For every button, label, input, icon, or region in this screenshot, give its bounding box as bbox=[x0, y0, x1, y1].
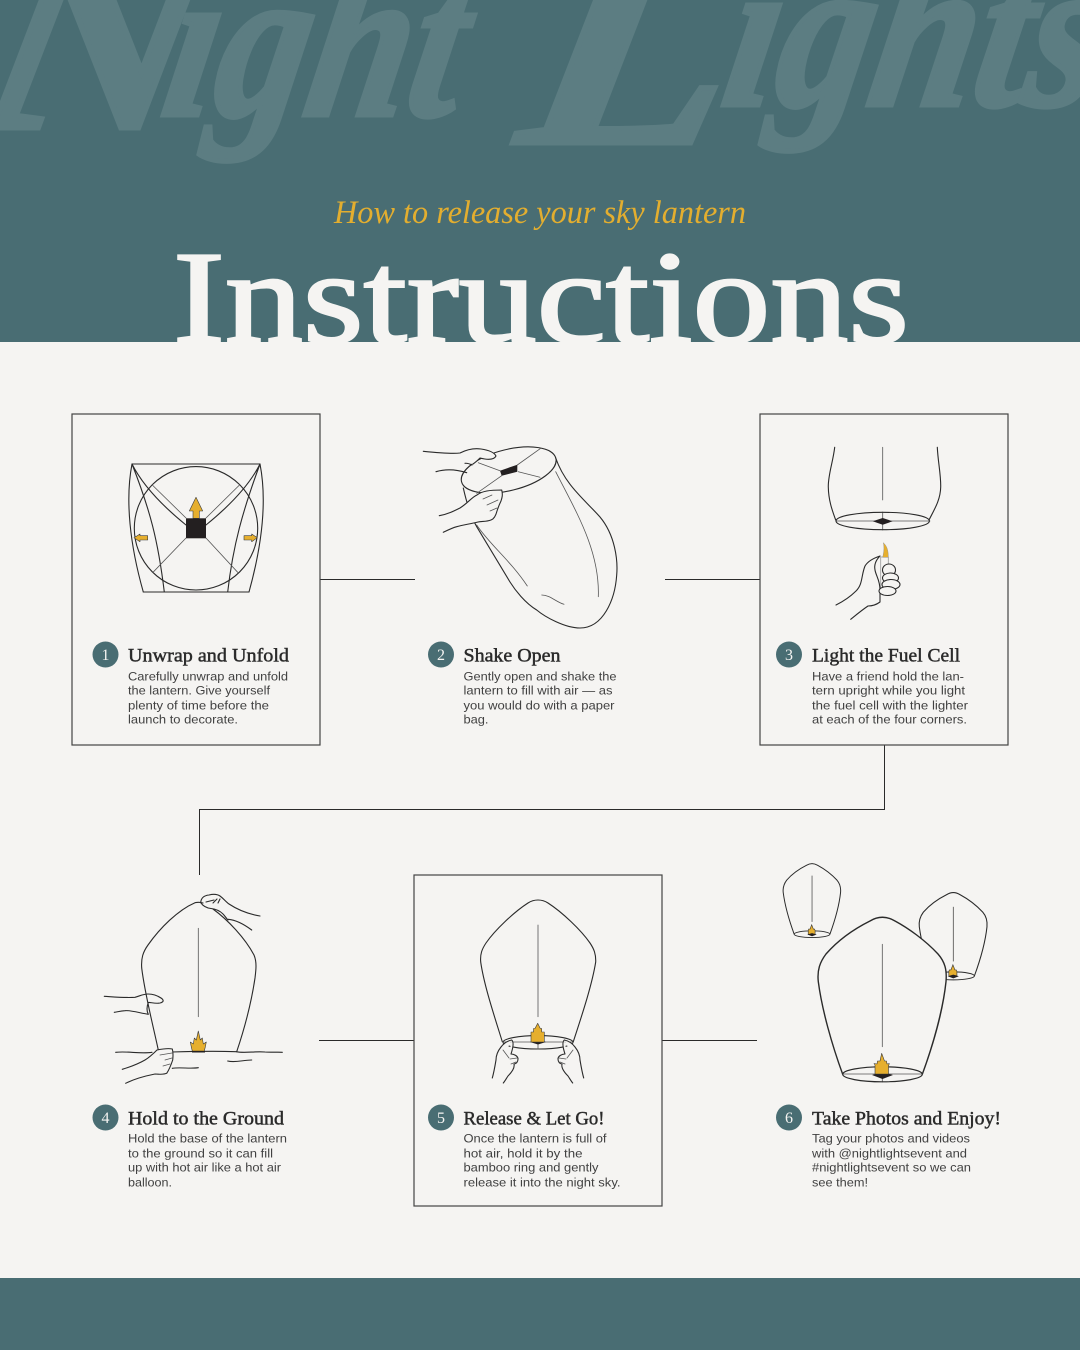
description: plenty of time before the bbox=[128, 698, 269, 712]
connector: step 5 to 6 bbox=[662, 1040, 757, 1042]
description bbox=[464, 670, 617, 726]
description: you would do with a paper bbox=[464, 698, 614, 712]
heading: Take Photos and Enjoy! bbox=[812, 1108, 1001, 1130]
title: Instructions: Instructions bbox=[173, 224, 909, 371]
description: #nightlightsevent so we can bbox=[812, 1160, 971, 1174]
connector: step 1 to 2 bbox=[320, 578, 415, 580]
panel frame bbox=[414, 875, 662, 1206]
description bbox=[811, 1132, 971, 1189]
small lantern right bbox=[919, 893, 987, 980]
panel: step 5 release and let go bbox=[414, 875, 662, 1206]
illustration: hands releasing lantern bbox=[481, 900, 596, 1083]
panel: step 3 light the fuel cell bbox=[760, 414, 1008, 745]
description: Have a friend hold the lan- bbox=[812, 670, 964, 684]
description: with @nightlightsevent and bbox=[811, 1146, 967, 1160]
description bbox=[128, 670, 288, 726]
description bbox=[128, 1132, 287, 1189]
heading: Unwrap and Unfold bbox=[128, 646, 290, 666]
badge 3 bbox=[776, 642, 802, 668]
description: tern upright while you light bbox=[812, 684, 966, 698]
description: launch to decorate. bbox=[128, 712, 238, 726]
badge 2 bbox=[428, 642, 454, 668]
description: the lantern. Give yourself bbox=[128, 684, 271, 698]
connector: step 3 to 4 bbox=[200, 745, 884, 875]
heading: Hold to the Ground bbox=[128, 1108, 285, 1130]
footer band bbox=[0, 1278, 1080, 1350]
description: lantern to fill with air — as bbox=[464, 684, 612, 698]
badge 4: 4 bbox=[102, 1110, 110, 1127]
description: Tag your photos and videos bbox=[812, 1132, 970, 1146]
illustration: unfolded lantern bbox=[129, 464, 263, 592]
description: up with hot air like a hot air bbox=[128, 1160, 281, 1174]
description: Gently open and shake the bbox=[464, 670, 617, 684]
small lantern left bbox=[783, 864, 841, 938]
heading: Release & Let Go! bbox=[464, 1108, 604, 1130]
panel: step 1 unwrap and unfold bbox=[72, 414, 320, 745]
description: release it into the night sky. bbox=[464, 1175, 620, 1189]
illustration: hands shaking lantern bbox=[423, 438, 617, 628]
description: bamboo ring and gently bbox=[464, 1160, 599, 1174]
description: at each of the four corners. bbox=[812, 712, 967, 726]
subtitle: How to release your sky lantern bbox=[333, 195, 746, 231]
panel: step 6 take photos and enjoy bbox=[776, 864, 1001, 1189]
description: Once the lantern is full of bbox=[464, 1132, 607, 1146]
watermark: Night Lights bbox=[0, 0, 1080, 205]
description: hot air, hold it by the bbox=[464, 1146, 583, 1160]
panel frame bbox=[760, 414, 1008, 745]
heading: Light the Fuel Cell bbox=[812, 646, 960, 666]
description bbox=[464, 1132, 620, 1189]
connector: step 4 to 5 bbox=[319, 1040, 414, 1042]
panel: step 2 shake open bbox=[423, 438, 617, 726]
illustration: lanterns in the sky bbox=[783, 864, 987, 1082]
description: bag. bbox=[464, 712, 488, 726]
large lantern bbox=[818, 917, 946, 1082]
badge 5: 5 bbox=[437, 1110, 445, 1127]
badge 4 bbox=[92, 1104, 118, 1130]
connector: step 2 to 3 bbox=[665, 578, 760, 580]
badge 5 bbox=[428, 1104, 454, 1130]
badge 1: 1 bbox=[102, 647, 110, 664]
badge 2: 2 bbox=[437, 647, 445, 664]
badge 6 bbox=[776, 1104, 802, 1130]
panel: step 4 hold to the ground bbox=[92, 894, 287, 1189]
illustration: holding lantern to the ground bbox=[104, 894, 282, 1083]
illustration: lighting fuel cell bbox=[828, 447, 941, 619]
heading: Shake Open bbox=[464, 646, 561, 666]
header band bbox=[0, 0, 1080, 342]
panel frame bbox=[72, 414, 320, 745]
page body background bbox=[0, 342, 1080, 1278]
description: the fuel cell with the lighter bbox=[812, 698, 968, 712]
badge 3: 3 bbox=[785, 647, 793, 664]
description: Carefully unwrap and unfold bbox=[128, 670, 288, 684]
description: to the ground so it can fill bbox=[128, 1146, 273, 1160]
description: Hold the base of the lantern bbox=[128, 1132, 287, 1146]
badge 1 bbox=[92, 642, 118, 668]
description bbox=[812, 670, 968, 726]
badge 6: 6 bbox=[785, 1110, 793, 1127]
description: balloon. bbox=[128, 1175, 172, 1189]
description: see them! bbox=[812, 1175, 868, 1189]
